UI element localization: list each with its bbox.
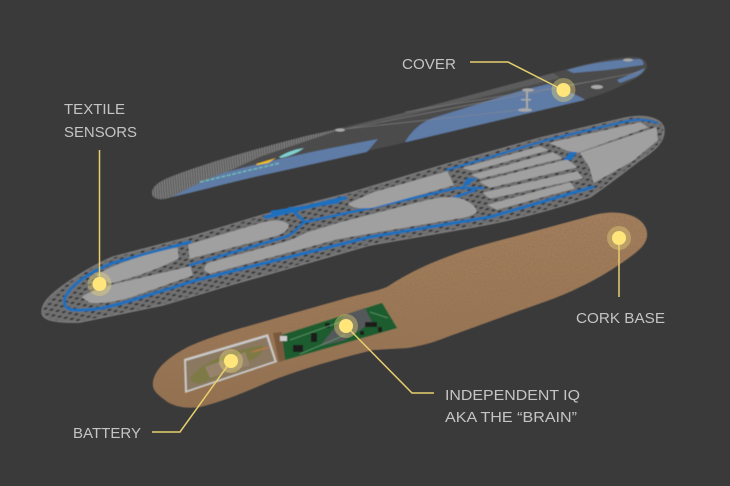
cork grain (153, 213, 647, 408)
marker: battery (219, 349, 243, 373)
leader line: cork base (618, 238, 620, 297)
label: textile sensors: TEXTILE (64, 102, 125, 118)
marker: brain (334, 314, 358, 338)
label: battery: BATTERY (73, 426, 141, 442)
label: independent iq (445, 388, 580, 426)
sensor pads (83, 123, 657, 302)
cover insole layer (152, 57, 647, 199)
blue conductive traces (64, 120, 657, 310)
cork base layer (153, 213, 647, 408)
blue wedge left (460, 178, 478, 190)
blue forefoot panel (405, 84, 585, 142)
marker: textile sensors (88, 272, 112, 296)
blue wedge right (563, 152, 577, 160)
marker: cover (552, 78, 576, 102)
label: cork base: CORK BASE (576, 311, 665, 327)
leader line: cover (470, 62, 563, 90)
battery tray (184, 334, 277, 393)
cover stitched lines (340, 72, 640, 130)
label: cover: COVER (402, 57, 456, 73)
label: independent iq: AKA THE “BRAIN” (445, 410, 577, 426)
leader line: brain (346, 326, 434, 393)
label: textile sensors: SENSORS (64, 125, 137, 141)
blue toe panel (567, 59, 644, 73)
label: textile sensors (64, 102, 137, 141)
cork body (153, 213, 647, 408)
leader line: textile sensors (98, 150, 100, 284)
cover logo (200, 148, 304, 182)
blue side strip (172, 139, 378, 197)
circuit board (273, 303, 397, 362)
leader line: battery (152, 361, 231, 432)
marker: cork base (607, 226, 631, 250)
sensor insole layer (42, 117, 664, 322)
cover details (335, 58, 633, 132)
blue toe side panel (617, 68, 645, 83)
mesh heel area (152, 128, 345, 199)
label: independent iq: INDEPENDENT IQ (445, 388, 580, 404)
upper light strip (345, 73, 560, 128)
